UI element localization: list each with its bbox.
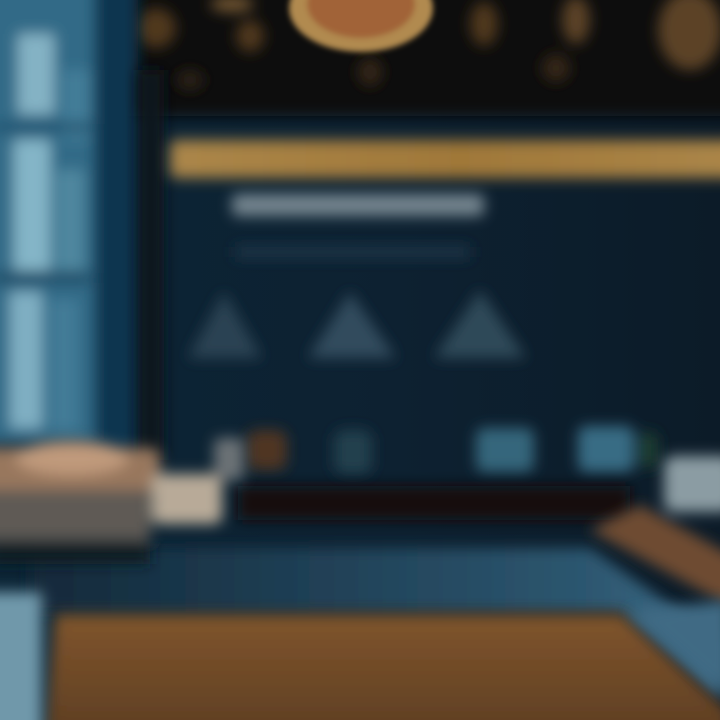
- ceiling medallion light: [289, 0, 433, 52]
- ceiling: dark band with warm lights: [110, 0, 720, 116]
- counter: [238, 486, 630, 520]
- right foreground blue panel: [628, 600, 720, 700]
- icon: middle triangle: [308, 292, 396, 358]
- icon: left triangle: [188, 292, 262, 358]
- left foreground reflection: [0, 592, 42, 720]
- triangle icons: [188, 290, 526, 358]
- gold header bar: [170, 140, 720, 178]
- right side furniture: [590, 456, 720, 612]
- shelf objects: [247, 426, 658, 474]
- left window: [0, 0, 138, 450]
- blurred headline: [232, 194, 484, 216]
- blue floor: [30, 548, 720, 700]
- sofa left: [0, 438, 244, 564]
- icon: right triangle: [434, 290, 526, 358]
- dark pillar beside window: [138, 70, 164, 460]
- wooden table: [45, 614, 720, 720]
- blurred subtitle: [235, 246, 470, 258]
